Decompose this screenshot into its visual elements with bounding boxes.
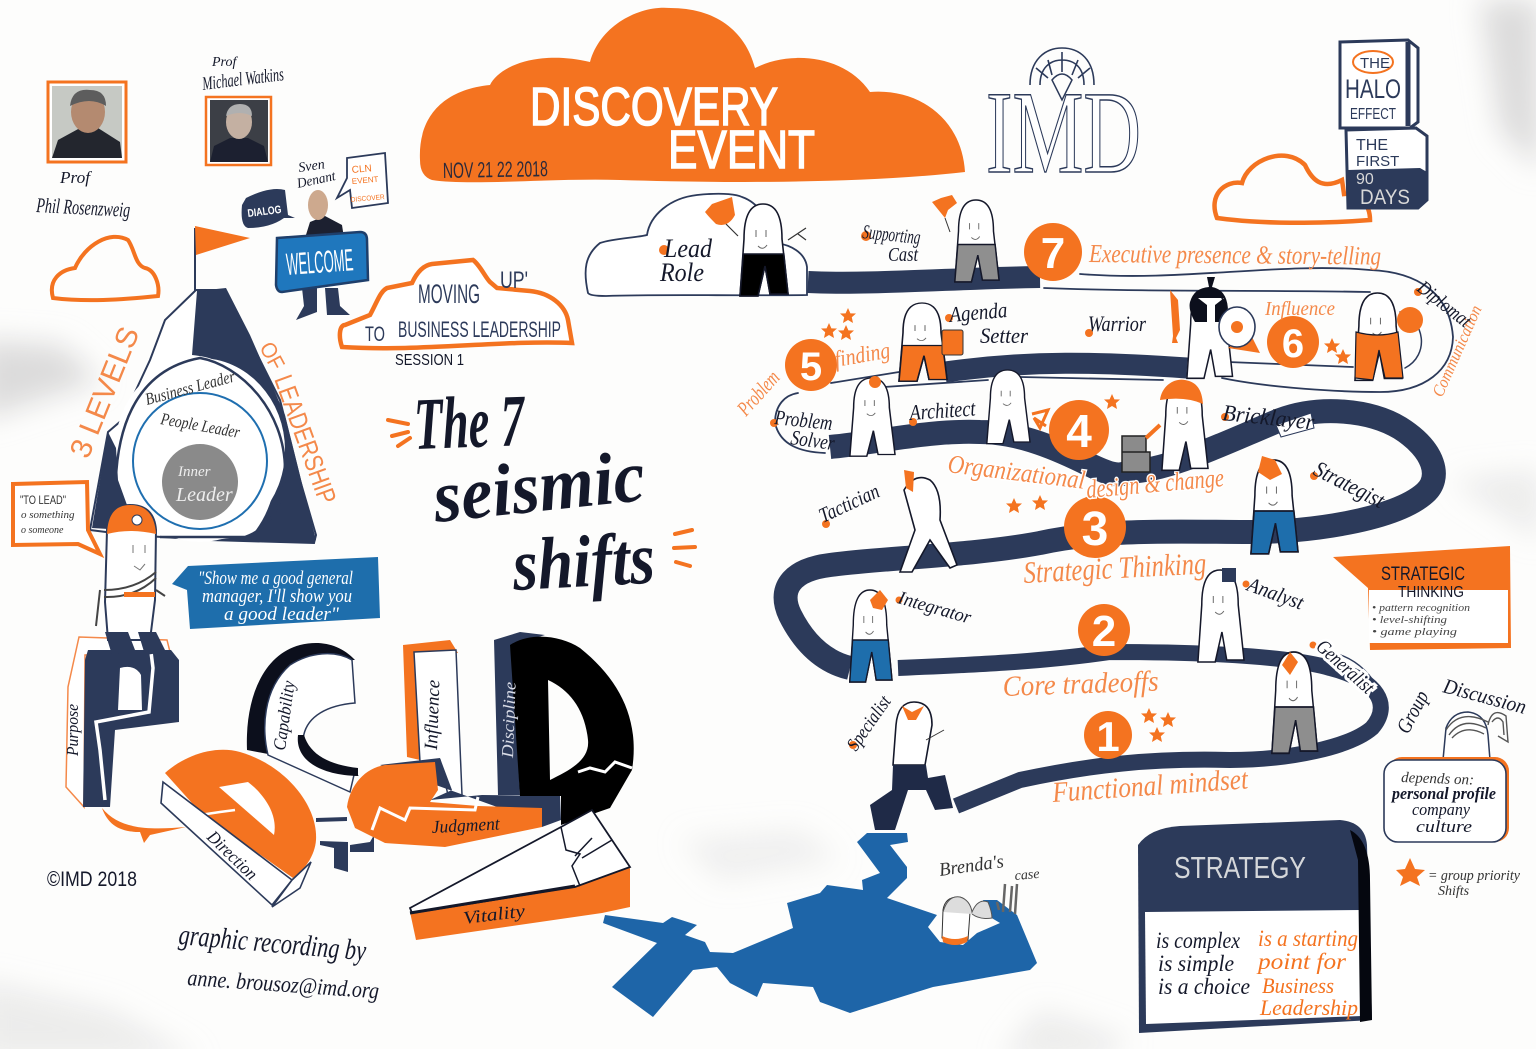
quote bubble [172, 557, 380, 629]
shift labels: finding [833, 338, 892, 372]
shift labels: design & change [1085, 463, 1225, 504]
speech bubble: To lead [13, 482, 100, 554]
panel: Strategy board: Leadership [1259, 995, 1358, 1020]
mountain: 3 levels of leadership: People Leader [159, 409, 242, 442]
books: The Halo Effect and The First 90 Days: THE [1356, 137, 1388, 154]
figure: Tactician [815, 470, 957, 572]
heading: Event: EVENT [668, 120, 815, 180]
quote bubble: "Show me a good general [198, 568, 353, 589]
panel: Strategy board: STRATEGY [1174, 850, 1306, 885]
figure: Integrator [850, 587, 974, 682]
credit: graphic recording: graphic recording by [177, 919, 368, 967]
main title: The 7 seismic shifts: seismic [428, 435, 649, 539]
shift labels: Executive presence & story-telling [1088, 239, 1381, 271]
speech bubble: To lead: "TO LEAD" [20, 493, 66, 507]
figure: Generalist [1272, 635, 1379, 753]
figure: Agenda Setter: Agenda [947, 297, 1008, 327]
main title: The 7 seismic shifts [388, 380, 695, 607]
figure: Problem Solver: Problem [773, 405, 834, 435]
wedge: Vitality [410, 810, 630, 940]
mountain: 3 levels of leadership: 3 LEVELS [64, 322, 146, 463]
IMD logo [986, 48, 1141, 198]
figure: Strategist: Strategist [1310, 456, 1389, 513]
mountain: 3 levels of leadership: OF [255, 338, 290, 374]
mountain: 3 levels of leadership: Inner [177, 464, 211, 480]
figure: Lead Role [659, 197, 806, 296]
legend: group priority shifts: = group priority [1428, 868, 1520, 884]
road: winding career path [586, 194, 1453, 806]
panel: Group discussion: culture [1416, 817, 1473, 836]
panel: Strategy board [1138, 820, 1372, 1033]
panel: Group discussion: Discussion [1440, 673, 1529, 719]
presenter Sven Denant with welcome sign: DISCOVER [351, 194, 385, 204]
letter C: Capability [247, 643, 374, 872]
water: Brenda's case [603, 833, 1040, 1017]
number badge 4 [1049, 400, 1109, 460]
speech bubble: To lead: o someone [21, 525, 64, 536]
figure: Lead Role: Lead [663, 234, 713, 263]
cloud outline top left [52, 237, 158, 300]
number badge 5 [785, 339, 837, 391]
mountain: 3 levels of leadership: Business Leader [143, 367, 237, 409]
figure: Lead Role: Role [659, 258, 704, 287]
main title: The 7 seismic shifts: The 7 [413, 380, 527, 466]
IMD logo: IMD [986, 67, 1141, 198]
panel: Group discussion [1384, 673, 1529, 842]
figure: Specialist: Specialist [843, 692, 896, 755]
figure: Architect [907, 370, 1048, 444]
wedge: Vitality: Vitality [462, 901, 526, 928]
panel: Strategy board: is simple [1158, 951, 1234, 976]
mountain: 3 levels of leadership: LEADERSHIP [268, 371, 343, 508]
letter D: Discipline: Discipline [498, 681, 520, 759]
letter I: Influence [403, 640, 462, 795]
number badge 4: 4 [1066, 405, 1092, 457]
figure: Architect: Architect [907, 395, 977, 425]
books: The Halo Effect and The First 90 Days: HALO [1345, 74, 1401, 104]
main title: The 7 seismic shifts: shifts [510, 518, 657, 607]
portrait: Prof Michael Watkins: Michael Watkins [200, 64, 285, 95]
number badge 7: 7 [1041, 229, 1065, 278]
letter P: Purpose: Purpose [63, 704, 82, 757]
quote bubble: manager, I'll show you [202, 586, 352, 607]
number badge 2 [1078, 604, 1130, 656]
letter I: Influence: Influence [421, 679, 444, 751]
cloud: Moving Up to Business Leadership: TO [365, 323, 385, 346]
figure: Strategist [1251, 456, 1389, 554]
number badge 5: 5 [800, 345, 822, 389]
figure: Diplomat: Diplomat [1412, 276, 1476, 332]
portrait: Prof Phil Rosenzweig [35, 82, 131, 222]
portrait: Prof Michael Watkins [200, 55, 285, 165]
quote bubble: a good leader" [224, 604, 340, 625]
title cloud: Discovery Event [420, 8, 965, 183]
presenter Sven Denant with welcome sign [242, 153, 388, 320]
panel: Strategy board: Business [1262, 973, 1334, 998]
panel: Group discussion: personal profile [1390, 784, 1496, 803]
legend: group priority shifts [1396, 858, 1520, 899]
letter J: Judgment [347, 758, 561, 847]
panel: Group discussion: Group [1391, 686, 1434, 737]
speech bubble: To lead: o something [21, 509, 75, 521]
presenter Sven Denant with welcome sign: DIALOG [247, 204, 282, 220]
letter D: Direction: Direction [203, 826, 262, 884]
number badge 1: 1 [1096, 713, 1120, 760]
books: The Halo Effect and The First 90 Days: 90 [1356, 171, 1374, 188]
figure: Diplomat [1355, 276, 1476, 380]
number badge 6 [1267, 316, 1319, 368]
books: The Halo Effect and The First 90 Days: DAYS [1360, 186, 1410, 209]
letter C: Capability: Capability [269, 679, 299, 752]
callout: Strategic Thinking: • level-shifting [1372, 614, 1448, 626]
presenter Sven Denant with welcome sign: Sven [297, 157, 326, 176]
books: The Halo Effect and The First 90 Days: THE [1360, 55, 1390, 72]
figure: Generalist: Generalist [1312, 635, 1379, 699]
cloud outline top right [1215, 156, 1370, 223]
water: Brenda's case: case [1014, 867, 1040, 884]
letter J: Judgment: Judgment [431, 813, 501, 837]
panel: Strategy board: is complex [1156, 928, 1241, 953]
heading: Discovery: DISCOVERY [530, 77, 778, 137]
figure: Warrior [1085, 277, 1260, 378]
number badge 3 [1064, 496, 1126, 558]
cloud: Moving Up to Business Leadership: SESSION 1 [395, 352, 464, 369]
presenter Sven Denant with welcome sign: Denant [295, 169, 338, 192]
books: The Halo Effect and The First 90 Days [1340, 40, 1427, 209]
figure: Supporting Cast: Supporting [861, 221, 921, 249]
figure: Analyst [1198, 568, 1308, 662]
callout: Strategic Thinking: • game playing [1372, 626, 1458, 638]
cloud: Moving Up to Business Leadership: MOVING [418, 279, 480, 309]
cloud: Moving Up to Business Leadership [340, 260, 572, 369]
panel: Strategy board: is a choice [1158, 974, 1250, 999]
shift labels: Organizational [946, 449, 1087, 495]
figure: Supporting Cast [861, 195, 999, 282]
credit: graphic recording: anne. brousoz@imd.org [187, 965, 380, 1003]
panel: Strategy board: is a starting [1258, 926, 1358, 951]
number badge 1 [1084, 711, 1132, 760]
callout: Strategic Thinking: STRATEGIC [1381, 564, 1465, 585]
mountain: 3 levels of leadership: Leader [175, 484, 233, 506]
figure: Specialist [843, 692, 953, 830]
callout: Strategic Thinking: THINKING [1398, 584, 1464, 601]
figure: Supporting Cast: Cast [888, 244, 918, 266]
climber figure [96, 505, 166, 655]
figure: Bricklayer [1122, 380, 1317, 472]
figure: Tactician: Tactician [815, 479, 883, 528]
figure: Problem Solver: Solver [789, 425, 837, 455]
cloud: Moving Up to Business Leadership: UP' [500, 267, 528, 294]
figure: Integrator: Integrator [895, 587, 974, 629]
number badge 3: 3 [1082, 503, 1108, 556]
portrait: Prof Michael Watkins: Prof [211, 55, 238, 70]
shift labels: Functional mindset [1050, 763, 1250, 809]
portrait: Prof Phil Rosenzweig: Phil Rosenzweig [35, 193, 131, 222]
water: Brenda's case: Brenda's [938, 851, 1005, 881]
shift labels: Strategic Thinking [1023, 545, 1207, 590]
copyright: ©IMD 2018 [47, 868, 137, 891]
figure: Warrior: Warrior [1088, 311, 1146, 336]
credit: graphic recording [177, 919, 380, 1003]
letter D: Discipline [494, 632, 634, 825]
figure: Agenda Setter: Setter [980, 323, 1028, 348]
books: The Halo Effect and The First 90 Days: FIRST [1356, 153, 1399, 170]
portrait: Prof Phil Rosenzweig: Prof [59, 168, 92, 187]
callout: Strategic Thinking: • pattern recognition [1372, 602, 1471, 614]
shift labels: Communication [1428, 302, 1486, 400]
panel: Strategy board: point for [1256, 949, 1347, 974]
figure: Agenda Setter [899, 297, 1028, 381]
mountain: 3 levels of leadership [64, 226, 343, 543]
shift labels: Problem [731, 366, 785, 421]
number badge 2: 2 [1092, 607, 1116, 656]
shift labels: Influence [1264, 298, 1335, 320]
date: NOV 21 22 2018 [443, 156, 548, 183]
figure: Analyst: Analyst [1243, 572, 1308, 615]
presenter Sven Denant with welcome sign: EVENT [351, 175, 379, 186]
presenter Sven Denant with welcome sign: CLN [351, 163, 372, 176]
letter D: Direction [161, 750, 316, 907]
panel: Group discussion: depends on: [1401, 770, 1474, 789]
number badge 7 [1024, 223, 1082, 281]
shift labels: Core tradeoffs [1002, 666, 1159, 703]
number badge 6: 6 [1282, 322, 1304, 366]
panel: Group discussion: company [1412, 800, 1470, 819]
stars: group priority shifts [821, 308, 1351, 742]
cloud: Moving Up to Business Leadership: BUSINESS LEADERSHIP [398, 317, 561, 342]
shift labels [731, 239, 1486, 809]
figure: Bricklayer: Bricklayer [1221, 400, 1317, 435]
presenter Sven Denant with welcome sign: WELCOME [285, 242, 354, 282]
books: The Halo Effect and The First 90 Days: EFFECT [1350, 106, 1396, 123]
callout: Strategic Thinking [1333, 546, 1511, 650]
legend: group priority shifts: Shifts [1438, 884, 1470, 899]
letter P: Purpose [63, 637, 186, 843]
figure: Problem Solver [770, 376, 895, 456]
